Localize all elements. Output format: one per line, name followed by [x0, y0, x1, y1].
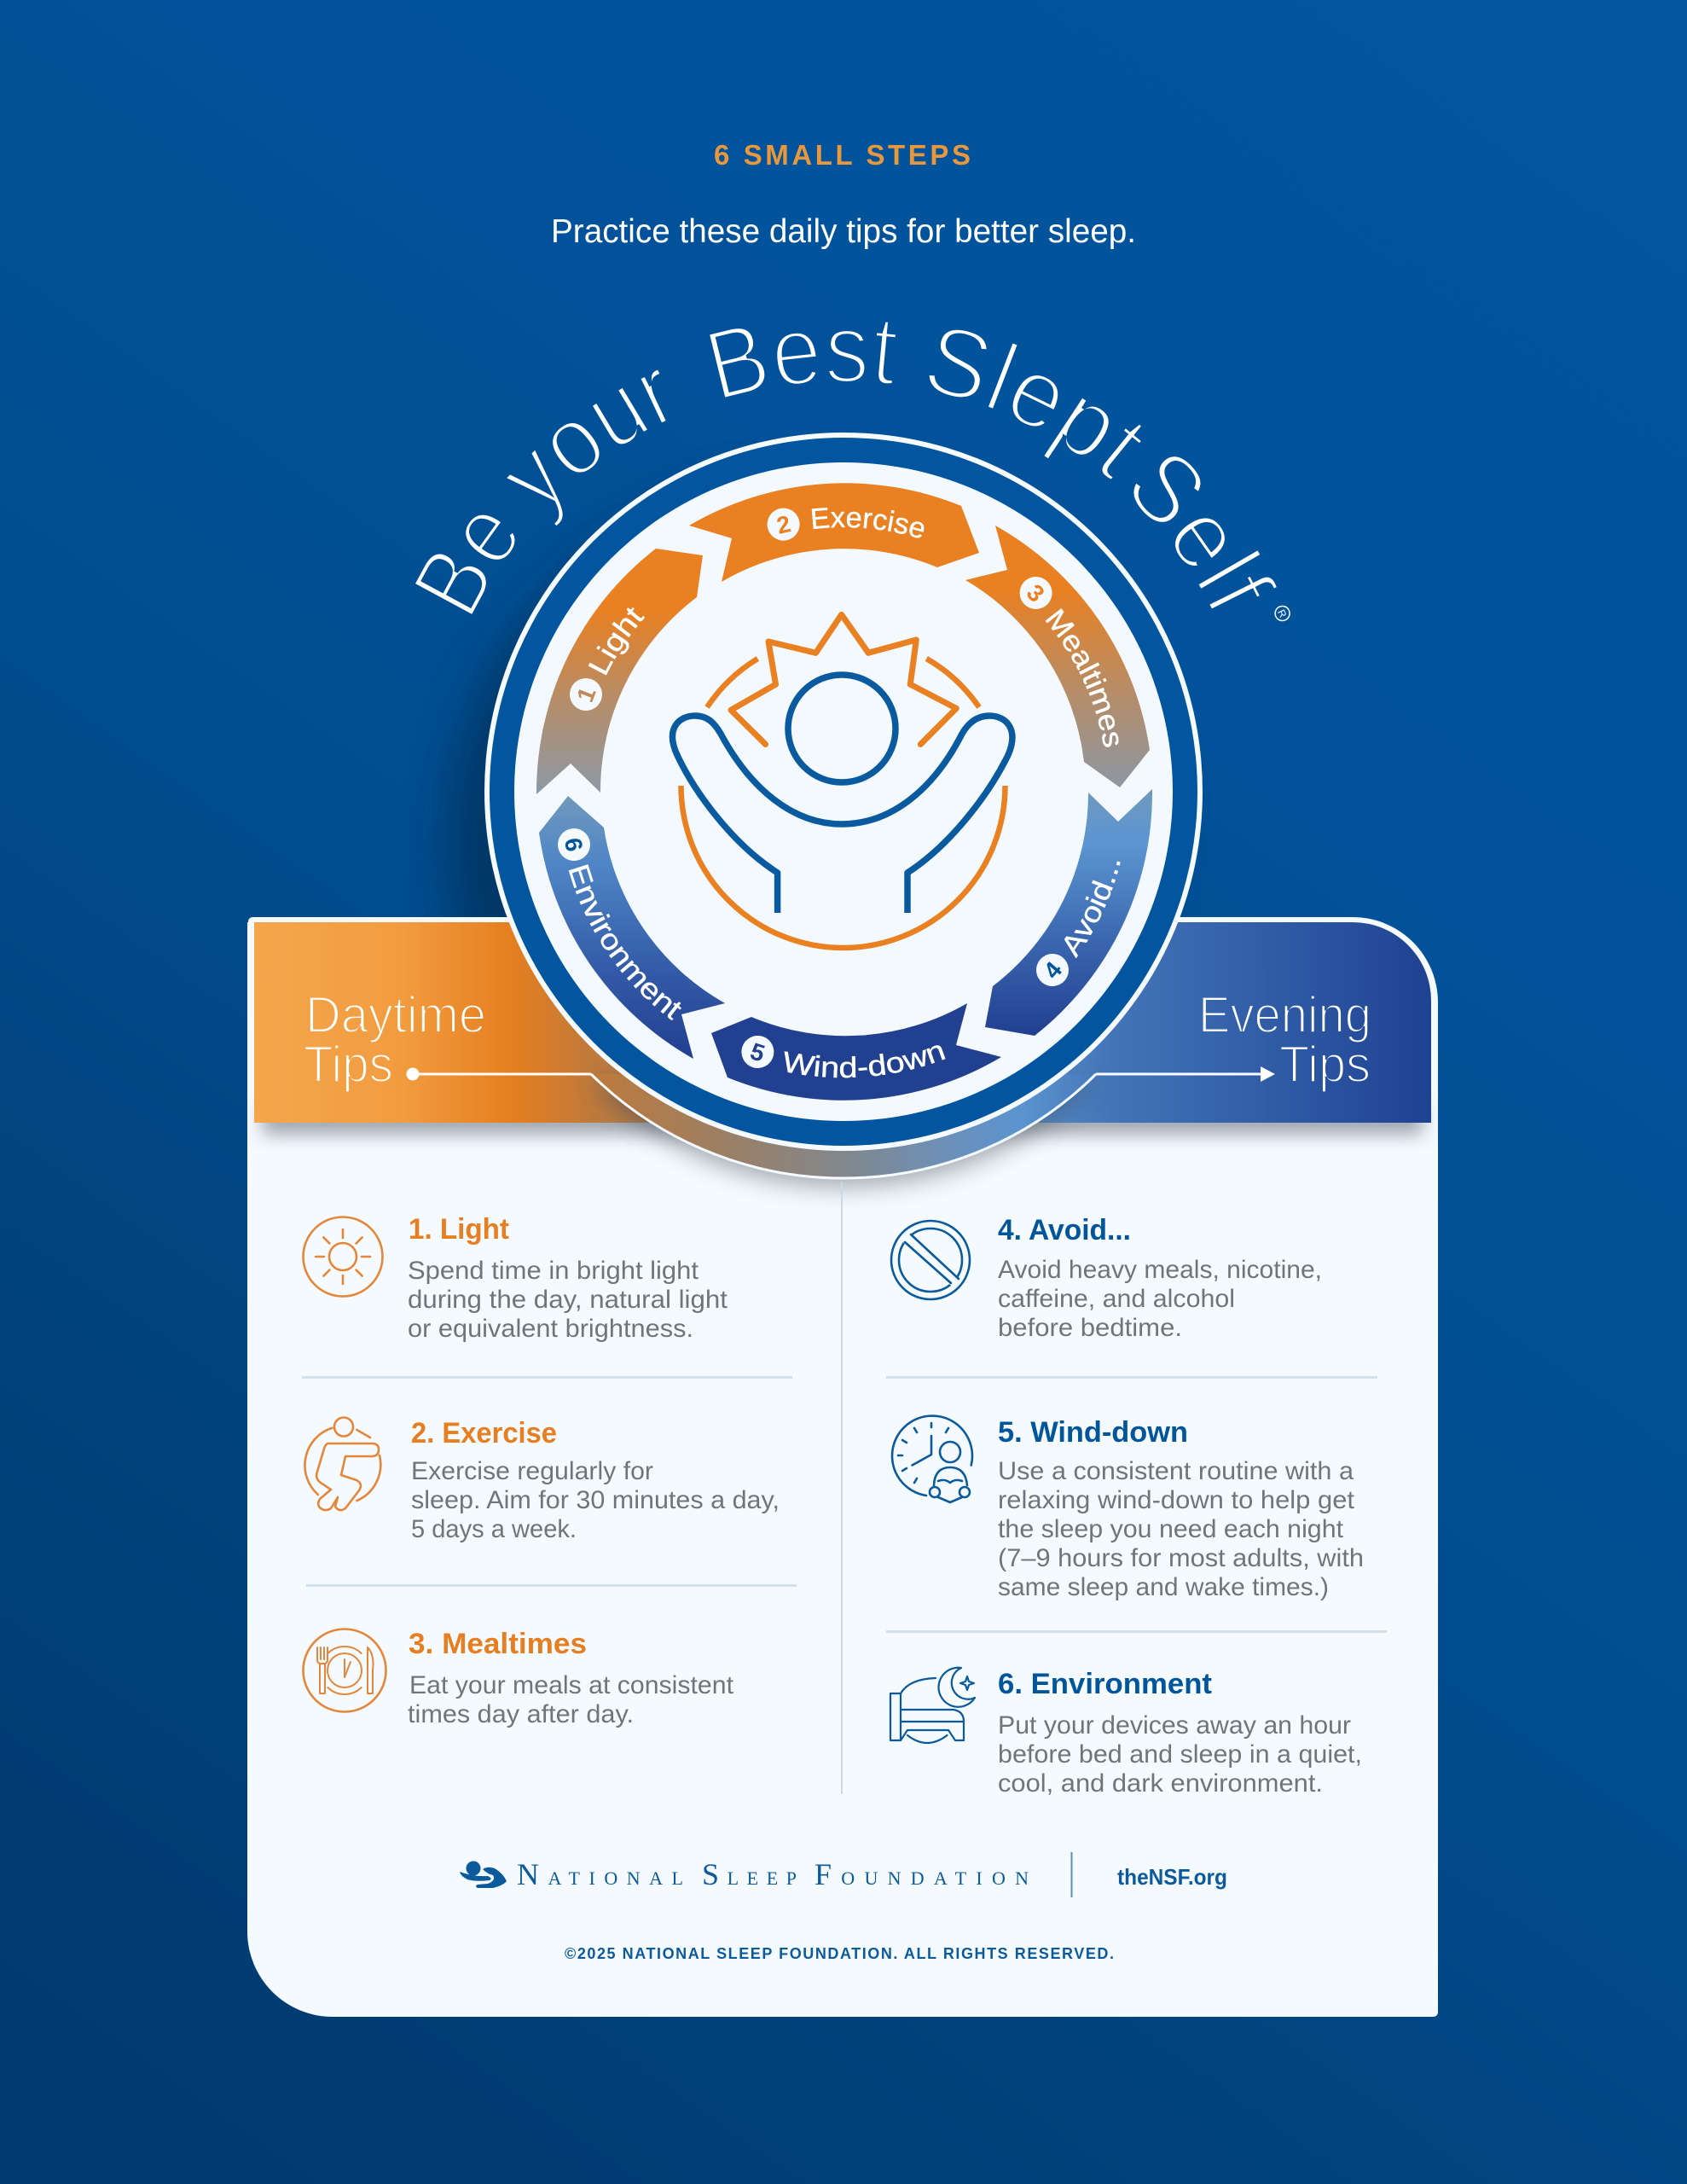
registered mark: R	[1275, 607, 1289, 619]
tip 3 mealtimes	[304, 1628, 734, 1728]
logo mark	[460, 1862, 507, 1888]
website: theNSF.org	[1117, 1864, 1227, 1890]
text: same sleep and wake times.)	[998, 1573, 1329, 1601]
tip 4 avoid	[891, 1214, 1322, 1342]
daytime tips label: Daytime	[305, 986, 486, 1043]
divider	[886, 1376, 1377, 1379]
main circle rings	[484, 433, 1203, 1151]
text: the sleep you need each night	[998, 1515, 1344, 1543]
footer divider	[1071, 1852, 1073, 1897]
badge 4	[1029, 947, 1075, 993]
text: caffeine, and alcohol	[998, 1285, 1235, 1313]
eyebrow: 6 small steps: 6 SMALL STEPS	[714, 139, 971, 171]
cycle arrow 2 exercise	[689, 483, 979, 582]
badge 5: 5	[747, 1037, 768, 1067]
heading: 1. Light	[409, 1213, 509, 1246]
badge 1: 1	[571, 683, 601, 706]
badge 6	[555, 826, 593, 863]
text: during the day, natural light	[408, 1286, 728, 1314]
badge 6: 6	[559, 835, 588, 854]
crescent shadow	[591, 1083, 1096, 1187]
text: Spend time in bright light	[408, 1257, 699, 1285]
logo wordmark: F OUNDATION	[815, 1857, 1029, 1891]
logo wordmark	[517, 1857, 1029, 1891]
text: Exercise regularly for	[411, 1457, 653, 1485]
evening arrow head	[1261, 1066, 1275, 1082]
icon: prohibited	[891, 1221, 970, 1299]
text	[998, 1256, 1322, 1342]
label: wind-down: Wind-down	[785, 1045, 945, 1078]
badge 5	[737, 1031, 778, 1072]
text	[408, 1671, 734, 1728]
registered mark	[1272, 604, 1292, 623]
panel: tips card	[247, 917, 1438, 2017]
daytime tips label	[304, 986, 486, 1093]
label: exercise: Exercise	[812, 507, 925, 537]
text: Avoid heavy meals, nicotine,	[998, 1256, 1322, 1284]
copyright: ©2025 NATIONAL SLEEP FOUNDATION. ALL RIGHTS RESERVED.	[565, 1945, 1114, 1962]
text	[998, 1457, 1364, 1601]
logo wordmark: S LEEP	[702, 1857, 797, 1891]
label: mealtimes: Mealtimes	[1046, 608, 1119, 747]
text: Use a consistent routine with a	[998, 1457, 1354, 1485]
heading: 3. Mealtimes	[409, 1628, 587, 1660]
subtitle: Practice these daily tips for better sleep.	[551, 213, 1136, 250]
icon: exercise	[304, 1418, 380, 1510]
tip 5 wind-down	[892, 1416, 1364, 1601]
crescent under circle	[591, 1074, 1096, 1178]
cycle arrow 6 environment	[539, 796, 725, 1059]
badge 3: 3	[1022, 579, 1050, 607]
text	[411, 1457, 780, 1543]
heading: 2. Exercise	[411, 1417, 557, 1449]
text: Put your devices away an hour	[998, 1711, 1351, 1740]
daytime tips label: Tips	[304, 1036, 393, 1093]
text: before bed and sleep in a quiet,	[998, 1740, 1362, 1769]
cycle arrow 3 mealtimes	[965, 526, 1150, 787]
title arc: Slept	[930, 329, 1141, 479]
cycle arrow 5 wind-down	[711, 1003, 1001, 1101]
text: relaxing wind-down to help get	[998, 1486, 1355, 1514]
tip 1 light	[304, 1213, 728, 1343]
label: environment: Environment	[568, 864, 681, 1020]
title arc: Be	[415, 515, 515, 614]
vertical divider	[841, 1182, 843, 1794]
cycle arrow 4 avoid	[985, 789, 1152, 1036]
evening tips label: Tips	[1279, 1036, 1371, 1093]
tip 2 exercise	[304, 1417, 780, 1543]
label: light: Light	[588, 607, 645, 676]
daytime dot	[406, 1068, 420, 1080]
title arc	[415, 322, 1277, 614]
title arc: your	[507, 370, 665, 526]
disc shadow on background	[448, 482, 1164, 1199]
text: Eat your meals at consistent	[409, 1671, 734, 1699]
divider	[302, 1376, 792, 1379]
icon: bed and moon	[890, 1668, 975, 1743]
divider	[306, 1584, 797, 1587]
heading: 6. Environment	[998, 1668, 1212, 1700]
badge 2: 2	[774, 510, 793, 539]
text: 5 days a week.	[411, 1515, 577, 1543]
text: cool, and dark environment.	[998, 1769, 1323, 1798]
text: or equivalent brightness.	[408, 1315, 693, 1343]
evening tips label: Evening	[1198, 986, 1371, 1043]
text: times day after day.	[408, 1700, 634, 1728]
text	[998, 1711, 1362, 1798]
cycle arrow 1 light	[536, 549, 703, 794]
heading: 5. Wind-down	[998, 1416, 1188, 1449]
icon: sun	[304, 1217, 382, 1297]
crescent outline with connector lines	[413, 1074, 1262, 1178]
text: sleep. Aim for 30 minutes a day,	[411, 1486, 780, 1514]
text: before bedtime.	[998, 1314, 1182, 1342]
badge 2	[764, 505, 803, 543]
icon: plate with clock	[304, 1629, 386, 1711]
heading: 4. Avoid...	[998, 1214, 1131, 1246]
tip 6 environment	[890, 1668, 1362, 1798]
evening tips label	[1198, 986, 1371, 1093]
text	[408, 1257, 728, 1343]
badge 3	[1013, 570, 1058, 616]
title arc: Self	[1133, 456, 1277, 609]
text: (7–9 hours for most adults, with	[998, 1544, 1364, 1572]
icon: clock with reader	[892, 1416, 972, 1502]
divider	[886, 1630, 1387, 1633]
header band: daytime and evening	[254, 922, 1431, 1123]
badge 4: 4	[1039, 956, 1067, 984]
icon: person with sun	[673, 614, 1012, 948]
header shadow	[263, 1106, 1423, 1135]
logo wordmark: N ATIONAL	[517, 1857, 683, 1891]
badge 1	[565, 673, 607, 716]
title arc: Best	[710, 322, 896, 398]
label: avoid: Avoid...	[1064, 862, 1121, 959]
